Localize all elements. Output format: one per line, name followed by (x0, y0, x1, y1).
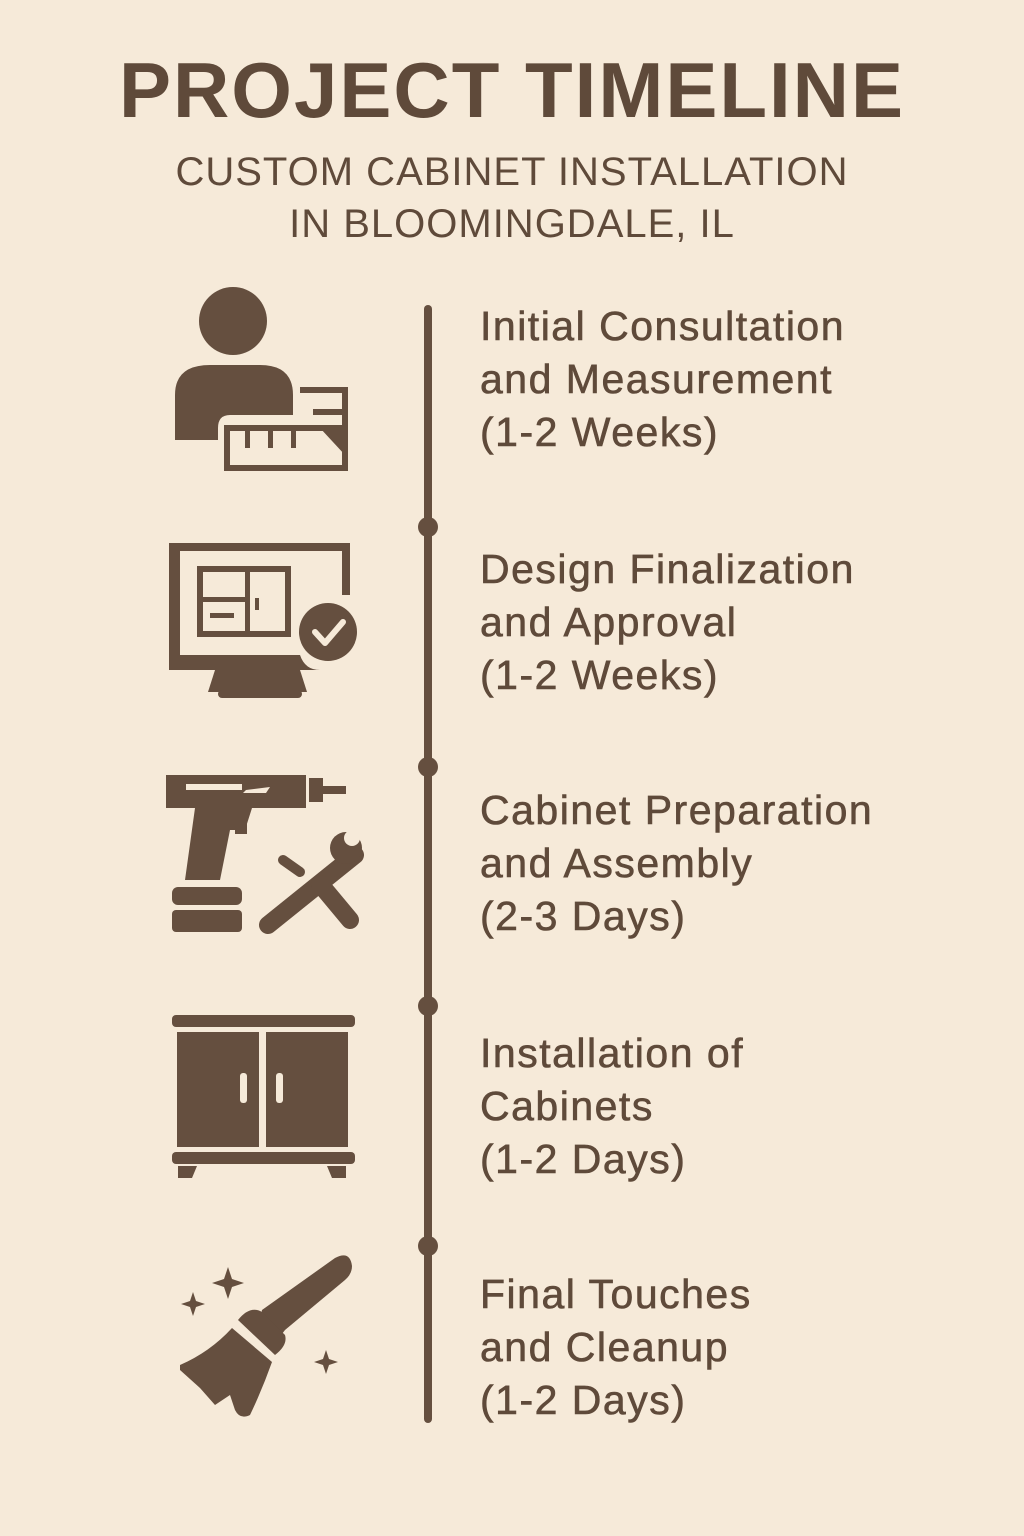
step 2 text: Design Finalization (480, 546, 855, 592)
step 1 text: (1-2 Weeks) (480, 409, 719, 455)
step 1 text: and Measurement (480, 356, 833, 402)
step 4 text: Cabinets (480, 1083, 654, 1129)
step 5 text (480, 1271, 752, 1423)
icon: monitor with check (169, 547, 362, 698)
step 2 text: and Approval (480, 599, 737, 645)
step 2 text (480, 546, 855, 698)
title: PROJECT TIMELINE (119, 46, 905, 134)
step 3 text: (2-3 Days) (480, 893, 686, 939)
step 2 text: (1-2 Weeks) (480, 652, 719, 698)
icon: drill and tools (166, 775, 362, 932)
step 5 text: Final Touches (480, 1271, 752, 1317)
step 4 text (480, 1030, 744, 1182)
step 5 text: and Cleanup (480, 1324, 729, 1370)
icon: person with ruler (166, 287, 364, 1417)
step 3 text: Cabinet Preparation (480, 787, 873, 833)
step 1 text (480, 303, 845, 455)
icon: brush with sparkles (180, 1255, 352, 1417)
subtitle (175, 150, 849, 246)
icon: cabinet (172, 1015, 355, 1178)
step 1 text: Initial Consultation (480, 303, 845, 349)
subtitle: CUSTOM CABINET INSTALLATION (175, 150, 849, 194)
step 3 text (480, 787, 873, 939)
step 4 text: Installation of (480, 1030, 744, 1076)
step 3 text: and Assembly (480, 840, 753, 886)
step 5 text: (1-2 Days) (480, 1377, 686, 1423)
subtitle: IN BLOOMINGDALE, IL (289, 202, 735, 246)
step 4 text: (1-2 Days) (480, 1136, 686, 1182)
